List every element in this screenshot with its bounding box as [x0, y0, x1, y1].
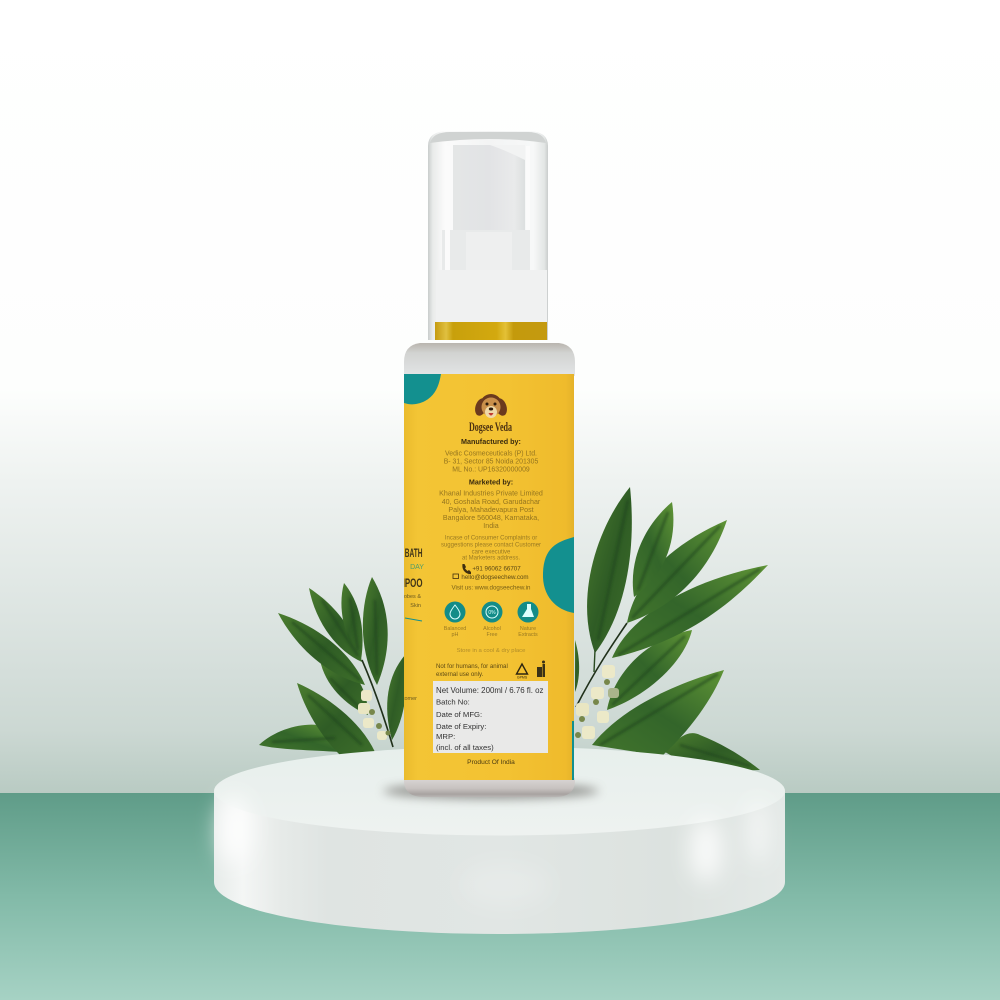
- icon: phone: [462, 564, 471, 574]
- manufacturer block: [444, 437, 538, 474]
- marketer block: Palya, Mahadevapura Post: [448, 506, 534, 514]
- clear over-cap: [428, 131, 548, 340]
- marketer block: [439, 478, 543, 530]
- badge: nature extracts: [518, 602, 538, 638]
- bottle: [392, 131, 575, 797]
- manufacturer block: Manufactured by:: [461, 437, 521, 446]
- bottle base: [404, 778, 575, 797]
- badge: balanced pH: pH: [452, 632, 459, 638]
- podium: [214, 746, 785, 934]
- floor band: [0, 793, 1000, 1000]
- contact details: +91 96062 66707: [472, 566, 521, 572]
- complaints note: suggestions please contact Customer: [441, 542, 541, 548]
- details box: Net Volume: 200ml / 6.76 fl. oz: [436, 686, 544, 695]
- front-label wrap text: DAY: [410, 564, 424, 571]
- details box: Date of MFG:: [436, 710, 482, 719]
- details box: (incl. of all taxes): [436, 743, 494, 752]
- front-label wrap text: E BATH: [398, 546, 422, 560]
- front-label wrap text: tomer: [403, 696, 417, 702]
- contact details: hello@dogseechew.com: [461, 574, 529, 581]
- brand name: Dogsee Veda: [469, 419, 512, 434]
- left leaf sprig: [259, 577, 405, 755]
- complaints note: [441, 536, 541, 562]
- usage warning: [436, 663, 508, 678]
- marketer block: Khanal Industries Private Limited: [439, 490, 543, 498]
- details box: MRP:: [436, 732, 455, 741]
- marketer block: Bangalore 560048, Karnataka,: [443, 514, 539, 522]
- manufacturer block: Vedic Cosmeceuticals (P) Ltd.: [445, 450, 537, 458]
- manufacturer block: B- 31, Sector 85 Noida 201305: [444, 458, 538, 466]
- badge: alcohol free: [482, 602, 502, 638]
- marketer block: Marketed by:: [469, 478, 513, 486]
- marketer block: 40, Goshala Road, Garudachar: [442, 498, 541, 506]
- podium highlights: [218, 796, 767, 907]
- details box: Batch No:: [436, 698, 470, 706]
- icon: recycle: GPMS: [517, 676, 528, 680]
- details box: Date of Expiry:: [436, 722, 486, 731]
- background wall: [0, 0, 1000, 793]
- icon: recycle: [516, 664, 528, 680]
- contact details: Visit us: www.dogseechew.in: [452, 584, 531, 592]
- origin line: Product Of India: [467, 759, 515, 766]
- front-label wrap text: [404, 548, 424, 700]
- badge: alcohol free: 0%: [488, 610, 496, 616]
- right leaf sprig: [575, 487, 768, 772]
- storage note: Store in a cool & dry place: [457, 648, 526, 654]
- icon: litter bin: [537, 660, 545, 677]
- front-label wrap text: Microbes &: [393, 594, 421, 600]
- complaints note: at Marketers address.: [462, 556, 520, 562]
- left flowers: [358, 690, 390, 740]
- bottle shoulder: [404, 343, 575, 376]
- manufacturer block: ML No.: UP16320000009: [452, 466, 530, 474]
- badge: alcohol free: Alcohol: [483, 626, 501, 632]
- details box: [433, 681, 548, 753]
- yellow label: [404, 374, 574, 780]
- usage warning: external use only.: [436, 671, 484, 678]
- badge: nature extracts: Nature: [520, 626, 536, 632]
- badge: alcohol free: Free: [486, 632, 498, 638]
- icon: mail: [453, 574, 458, 578]
- bottle shadow: [383, 783, 599, 799]
- marketer block: India: [483, 522, 499, 530]
- logo: dog face: [473, 394, 509, 418]
- usage warning: Not for humans, for animal: [436, 663, 508, 670]
- gold collar band: [435, 322, 547, 340]
- contact details: [452, 566, 531, 592]
- badge: balanced pH: Balanced: [444, 626, 466, 632]
- complaints note: care executive: [472, 550, 511, 556]
- right flowers: [575, 665, 619, 739]
- badge: nature extracts: Extracts: [518, 632, 538, 638]
- front-label wrap text: AMPOO: [392, 576, 422, 590]
- front-label wrap text: Skin: [410, 603, 421, 609]
- teal shapes: [404, 374, 574, 780]
- complaints note: Incase of Consumer Complaints or: [445, 536, 537, 542]
- badge: balanced pH: [444, 602, 466, 638]
